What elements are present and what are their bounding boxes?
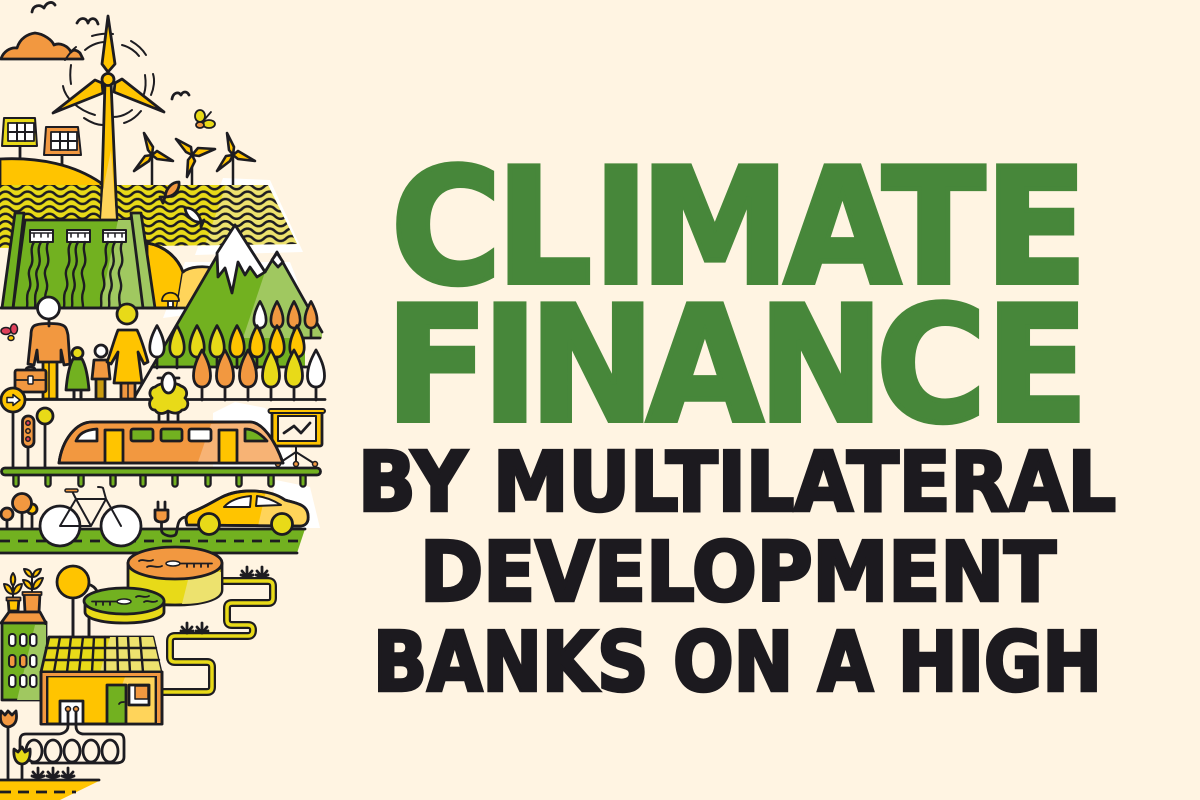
hydro dam (2, 213, 155, 308)
waves (0, 185, 300, 248)
woman (107, 304, 148, 399)
trees: middle row (150, 326, 304, 368)
coil pipe (20, 712, 124, 763)
lamp ball (37, 408, 53, 468)
water falls (27, 242, 122, 307)
child in orange (92, 345, 110, 399)
posts behind house (73, 600, 89, 637)
dam gates (30, 230, 126, 242)
butterfly (195, 110, 215, 128)
mountains (134, 225, 322, 398)
subtitle line 3: BANKS ON A HIGH (373, 615, 1102, 710)
child in green (66, 348, 89, 399)
mast (101, 82, 117, 219)
green tank (84, 588, 164, 623)
subtitle line 1: BY MULTILATERAL (358, 435, 1116, 530)
white background patches (163, 178, 320, 528)
turbine motion arcs (63, 34, 154, 125)
big plant leaves (23, 569, 43, 592)
small roadside trees (1, 494, 37, 529)
green apartment building (1, 612, 46, 700)
subtitle line 2: DEVELOPMENT (420, 525, 1056, 620)
electric car (186, 491, 308, 534)
blades (102, 16, 115, 72)
hill (0, 159, 101, 192)
snow caps (217, 225, 265, 293)
meter box (60, 701, 83, 724)
house with solar roof (41, 637, 162, 724)
man with briefcase (15, 297, 70, 399)
ground wedge (0, 780, 99, 800)
train (59, 422, 283, 463)
red butterfly (1, 324, 18, 340)
orange tank (128, 547, 222, 605)
train rail bridge (2, 468, 320, 484)
big pot (22, 592, 42, 612)
small pot (6, 598, 20, 611)
birds (32, 2, 189, 99)
house hatched trim (42, 673, 160, 723)
title: finance: FINANCE (385, 272, 1088, 459)
illustration: sustainable city and landscape (0, 2, 325, 800)
title: climate: CLIMATE (391, 134, 1087, 321)
sheep (150, 373, 188, 423)
ground tufts (32, 768, 74, 778)
trees: front row (194, 350, 324, 400)
solar panel: orange (44, 127, 81, 165)
presentation board (268, 409, 325, 466)
traffic light (22, 416, 34, 468)
fish: orange (160, 182, 179, 203)
small plant leaves (4, 573, 22, 597)
yellow ball post (57, 566, 98, 637)
plug and cable (155, 502, 186, 536)
pipe (162, 581, 273, 692)
direction sign (1, 388, 25, 468)
ground line (26, 398, 325, 401)
cloud (1, 33, 83, 59)
potted plants (4, 569, 43, 612)
small wind turbines (134, 133, 255, 188)
mushroom (162, 293, 179, 307)
big wind turbine (53, 16, 164, 219)
trees: back row (254, 301, 317, 337)
yellow hills behind dam (147, 243, 212, 308)
yellow tulip (14, 747, 30, 780)
road (0, 529, 305, 553)
fish: white (185, 208, 204, 227)
door (107, 685, 126, 724)
orange tulip (0, 711, 17, 780)
solar panel: lemon (2, 118, 37, 158)
window (129, 685, 149, 705)
bicycle (40, 487, 141, 546)
grass tufts (181, 567, 268, 633)
